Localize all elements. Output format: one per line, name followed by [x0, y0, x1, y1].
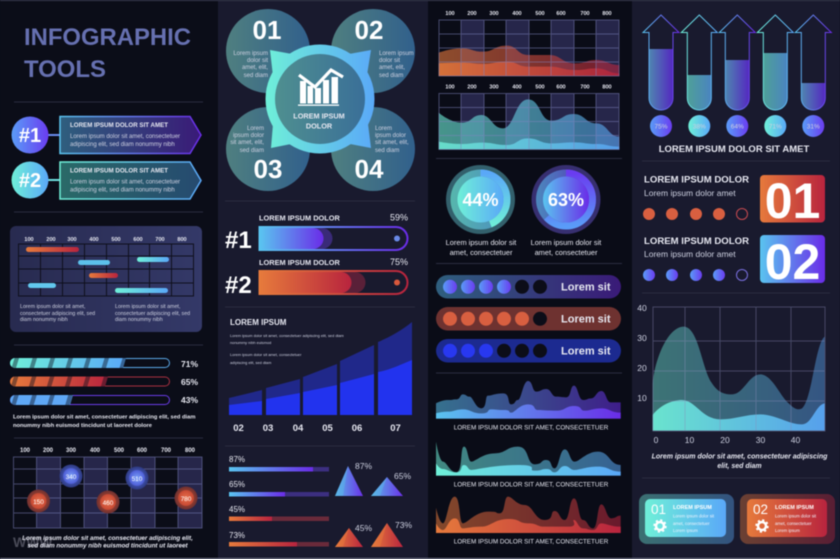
pill 2	[436, 307, 621, 330]
progress #2: #2	[225, 272, 252, 299]
icon: gear	[654, 520, 666, 532]
hub diagram	[226, 9, 415, 191]
donut 63%: Lorem ipsum dolor sit	[531, 238, 601, 247]
panel text right: consectetuer adipiscing elit, sed	[115, 311, 190, 317]
y axis	[637, 303, 647, 403]
pill 1	[436, 275, 621, 298]
tube 64%	[719, 15, 755, 137]
central ring	[266, 44, 374, 154]
striped progress bars: 65%	[181, 377, 198, 387]
tube 38%	[681, 15, 717, 137]
callout #1: adipiscing elit, sed diam nonummy nibh	[70, 142, 175, 148]
donut 63%	[531, 165, 601, 257]
teal area grid chart: 600	[556, 84, 566, 90]
rating block 01: Lorem ipsum dolor amet	[644, 188, 736, 198]
axis labels	[24, 237, 187, 243]
callout #2: Lorem ipsum dolor sit amet, consectetuer	[70, 180, 180, 186]
bubbles: 460	[103, 500, 114, 507]
card 02	[740, 494, 835, 544]
blue segmented area chart	[229, 322, 412, 434]
callout #2	[12, 162, 201, 199]
ridge chart red	[436, 497, 621, 546]
red area grid chart: 200	[467, 11, 477, 17]
tube 38%: 38%	[693, 124, 706, 130]
x axis: 30	[756, 435, 765, 445]
column 4	[637, 15, 835, 544]
donut 44%	[446, 165, 516, 257]
horizontal thin bars: 45%	[229, 505, 245, 514]
ridge chart purple: LOREM IPSUM DOLOR SIT AMET, CONSECTETUER	[454, 424, 609, 432]
bubble caption: sed diam nonummy nibh euismod tincidunt ut laoreet	[27, 542, 189, 550]
circle 03: sit amet, elit,	[230, 140, 264, 146]
circle 02: sed diam	[379, 73, 403, 79]
donut 63%: 63%	[548, 190, 584, 210]
striped progress bars	[10, 358, 198, 405]
title: TOOLS	[24, 56, 106, 83]
circle 02: 02	[355, 15, 383, 45]
pill 3	[436, 339, 621, 362]
y axis: 40	[637, 303, 647, 313]
bubble caption	[22, 535, 193, 550]
column 3	[436, 11, 622, 546]
pyramid charts: 87%	[355, 461, 372, 471]
chart caption	[652, 454, 828, 470]
bubbles: 150	[33, 499, 44, 506]
year labels: 04	[293, 423, 304, 434]
hub label: DOLOR	[306, 122, 333, 130]
hub label	[293, 112, 345, 130]
bubble axis labels: 400	[90, 448, 101, 454]
circle 02	[331, 9, 415, 93]
teal area grid chart: 700	[580, 84, 590, 90]
year labels: 05	[322, 423, 333, 434]
x axis: 20	[720, 435, 730, 445]
tube 71%	[757, 15, 793, 137]
rating block 01: LOREM IPSUM DOLOR	[644, 174, 749, 186]
donut 44%: amet, consectetuer	[450, 248, 513, 257]
area chart heading: nonummy nibh euismod	[230, 340, 271, 345]
circle 01: 01	[253, 15, 281, 45]
red area grid chart: 300	[489, 11, 499, 17]
card 01: LOREM IPSUM	[673, 505, 712, 511]
axis labels: 300	[67, 237, 77, 243]
teal area grid chart: 800	[602, 84, 612, 90]
axis labels: 700	[155, 237, 165, 243]
x axis	[654, 435, 800, 445]
callout #1: Lorem ipsum dolor sit amet, consectetuer	[70, 134, 180, 140]
gantt bars	[26, 247, 169, 293]
red area grid chart: 800	[602, 11, 612, 17]
gantt grid	[18, 244, 194, 296]
red area grid chart: 700	[580, 11, 590, 17]
axis labels: 100	[24, 237, 34, 243]
panel text right: Lorem ipsum dolor sit amet,	[115, 304, 180, 310]
callout #1	[12, 116, 201, 154]
circle 04: ipsum dolor	[375, 133, 406, 139]
circle 01	[226, 9, 310, 93]
bubble axis labels: 200	[43, 448, 54, 454]
bubble axis labels: 600	[137, 448, 148, 454]
teal area grid chart: 500	[535, 84, 545, 90]
bubbles: 340	[66, 474, 77, 481]
pyramid charts: 65%	[394, 471, 411, 481]
tube 71%: 71%	[769, 124, 782, 130]
callout #1: #1	[19, 125, 41, 147]
rating block 01	[643, 173, 825, 229]
bubble axis labels: 800	[185, 448, 196, 454]
bubbles: 780	[181, 496, 192, 503]
panel text left: Lorem ipsum dolor sit amet,	[20, 304, 85, 310]
x axis: 40	[791, 435, 800, 445]
area chart heading: adipiscing elit, sed diam	[230, 360, 271, 365]
circle 04: sed diam	[375, 148, 399, 154]
bubble chart	[14, 448, 202, 528]
tube 75%	[643, 15, 679, 137]
circle 04: sit amet, elit,	[375, 140, 409, 146]
pill 3: Lorem sit	[561, 346, 611, 358]
icon: gear	[756, 520, 768, 532]
circle 03	[226, 107, 310, 191]
year labels: 03	[263, 423, 273, 434]
circle 03: 03	[254, 154, 282, 184]
tube 31%	[795, 15, 831, 137]
ridge chart teal: LOREM IPSUM DOLOR SIT AMET, CONSECTETUER	[454, 482, 609, 488]
panel text left: consectetuer adipiscing elit, sed	[20, 311, 95, 317]
circle 03: sed diam	[240, 148, 264, 154]
chart caption: elit, sed diam	[717, 463, 762, 470]
horizontal thin bars: 65%	[229, 480, 245, 489]
arrow tubes	[643, 15, 831, 137]
donut 63%: amet, consectetuer	[535, 248, 598, 257]
panel text left	[20, 304, 95, 323]
bubble axis labels: 300	[66, 448, 77, 454]
y axis: 10	[637, 393, 647, 403]
year labels: 07	[390, 423, 401, 434]
tubes heading: LOREM IPSUM DOLOR SIT AMET	[659, 144, 809, 155]
rating block 02: LOREM IPSUM DOLOR	[644, 236, 749, 247]
callout #2: adipiscing elit, sed diam nonummy nibh	[70, 188, 175, 194]
card 02: 02	[753, 502, 768, 517]
rating block 01: 01	[765, 173, 820, 229]
circle 03: ipsum dolor	[233, 133, 264, 139]
card 01: Lorem ipsum dolor sit	[673, 514, 715, 518]
hub label: LOREM IPSUM	[293, 112, 345, 120]
pill 2: Lorem sit	[561, 314, 611, 326]
red area grid chart: 500	[535, 11, 545, 17]
panel text right: diam nonummy nibh	[115, 317, 163, 323]
circle 01: Lorem ipsum	[233, 51, 268, 57]
card 01: 01	[651, 502, 666, 517]
card 01: Lorem ipsum	[673, 528, 698, 533]
circle 01: dolor sit	[247, 58, 268, 64]
teal area grid chart: 300	[489, 84, 499, 90]
bubbles: 510	[132, 476, 143, 483]
panel: gantt chart	[10, 226, 202, 332]
circle 03: Lorem	[247, 126, 264, 132]
red area grid chart: 100	[445, 11, 455, 17]
ridge chart red: LOREM IPSUM DOLOR SIT AMET, CONSECTETUER	[454, 538, 609, 546]
axis labels: 600	[133, 237, 143, 243]
horizontal thin bars: 73%	[229, 531, 245, 540]
axis labels: 400	[89, 237, 99, 243]
card 01	[639, 494, 734, 544]
panel text right	[115, 304, 190, 323]
pyramid charts	[335, 461, 412, 547]
column 2	[225, 9, 415, 547]
circle 04: 04	[355, 154, 384, 184]
ridge chart purple	[436, 381, 621, 432]
title: INFOGRAPHIC	[24, 24, 191, 51]
bubble caption: Lorem ipsum dolor sit amet, consectetuer adipiscing elit,	[22, 535, 193, 542]
circle 01: sed diam	[244, 73, 268, 79]
striped progress bars: 43%	[181, 395, 198, 405]
bubble axis labels: 100	[20, 448, 31, 454]
card 02: Lorem ipsum	[775, 528, 800, 533]
area chart heading	[230, 318, 344, 365]
teal area grid chart: 200	[467, 84, 477, 90]
title	[24, 24, 191, 83]
axis labels: 200	[46, 237, 56, 243]
pyramid charts: 73%	[395, 520, 412, 530]
circle 01: amet, elit,	[242, 65, 268, 71]
card 02: Lorem ipsum dolor sit	[775, 514, 817, 518]
pill 1: Lorem sit	[561, 282, 611, 294]
axis labels: 800	[177, 237, 187, 243]
tube 31%: 31%	[807, 124, 820, 130]
teal area grid chart	[439, 84, 619, 150]
progress #2	[225, 257, 408, 299]
red area grid chart: 400	[512, 11, 522, 17]
card 02: LOREM IPSUM	[775, 505, 814, 511]
ridge chart teal	[436, 442, 621, 488]
bubbles	[27, 464, 198, 514]
rating block 02	[643, 234, 825, 290]
bubble axis labels: 700	[161, 448, 172, 454]
icon: chart	[298, 70, 343, 106]
callout #2: LOREM IPSUM DOLOR SIT AMET	[70, 168, 168, 174]
circle 02: Lorem ipsum	[379, 51, 414, 57]
watermark: WWW	[13, 534, 53, 550]
year labels: 06	[352, 423, 362, 434]
circle 04	[331, 107, 415, 191]
column 1	[10, 24, 203, 550]
callout #1: LOREM IPSUM DOLOR SIT AMET	[70, 122, 168, 129]
progress caption: Lorem ipsum dolor sit amet, consectetuer adipiscing elit, sed diam	[13, 414, 195, 420]
progress #1	[225, 212, 408, 254]
circle 04: Lorem	[375, 126, 392, 132]
area chart heading: Lorem ipsum dolor sit amet, consectetuer adipiscing elit, sed diam	[230, 333, 344, 338]
panel text left: diam nonummy nibh	[20, 317, 68, 323]
progress #1: LOREM IPSUM DOLOR	[259, 214, 341, 222]
donut 44%: Lorem ipsum dolor sit	[446, 238, 516, 247]
red area grid chart	[439, 11, 619, 76]
tube 75%: 75%	[654, 124, 668, 130]
area chart heading: LOREM IPSUM	[230, 318, 287, 327]
axis labels: 500	[111, 237, 121, 243]
big area chart	[637, 303, 825, 445]
x axis: 0	[654, 435, 659, 445]
card 02: amet, consectetuer	[775, 521, 812, 526]
progress caption	[13, 414, 195, 429]
x axis: 10	[685, 435, 694, 445]
horizontal thin bars	[229, 455, 329, 546]
rating block 02: 02	[765, 234, 820, 290]
card 01: amet, consectetuer	[673, 521, 710, 526]
donut 44%: 44%	[462, 190, 499, 210]
year labels	[233, 423, 401, 434]
y axis: 30	[637, 333, 647, 343]
progress #1: #1	[225, 227, 252, 254]
striped progress bars: 71%	[181, 359, 198, 369]
y axis: 20	[637, 363, 647, 373]
horizontal thin bars: 87%	[229, 455, 245, 464]
progress caption: nonummy nibh euismod tincidunt ut laoreet dolore	[13, 423, 152, 429]
red area grid chart: 600	[556, 11, 566, 17]
circle 02: dolor sit	[379, 58, 400, 64]
bubble axis labels	[20, 448, 196, 454]
rating block 02: Lorem ipsum dolor amet	[644, 249, 736, 259]
progress #1: 59%	[390, 212, 408, 222]
bubble axis labels: 500	[114, 448, 125, 454]
teal area grid chart: 100	[445, 84, 455, 90]
progress #2: 75%	[390, 257, 408, 267]
circle 02: amet, elit,	[379, 65, 405, 71]
tube 64%: 64%	[731, 124, 744, 130]
chart caption: Lorem ipsum dolor sit amet, consectetuer adipiscing	[652, 454, 828, 460]
area chart heading: Lorem ipsum dolor sit amet, consectetuer	[230, 352, 302, 357]
pyramid charts: 45%	[355, 523, 372, 533]
progress #2: LOREM IPSUM DOLOR	[259, 258, 341, 267]
callout #2: #2	[19, 170, 41, 192]
year labels: 02	[233, 423, 244, 434]
teal area grid chart: 400	[512, 84, 522, 90]
